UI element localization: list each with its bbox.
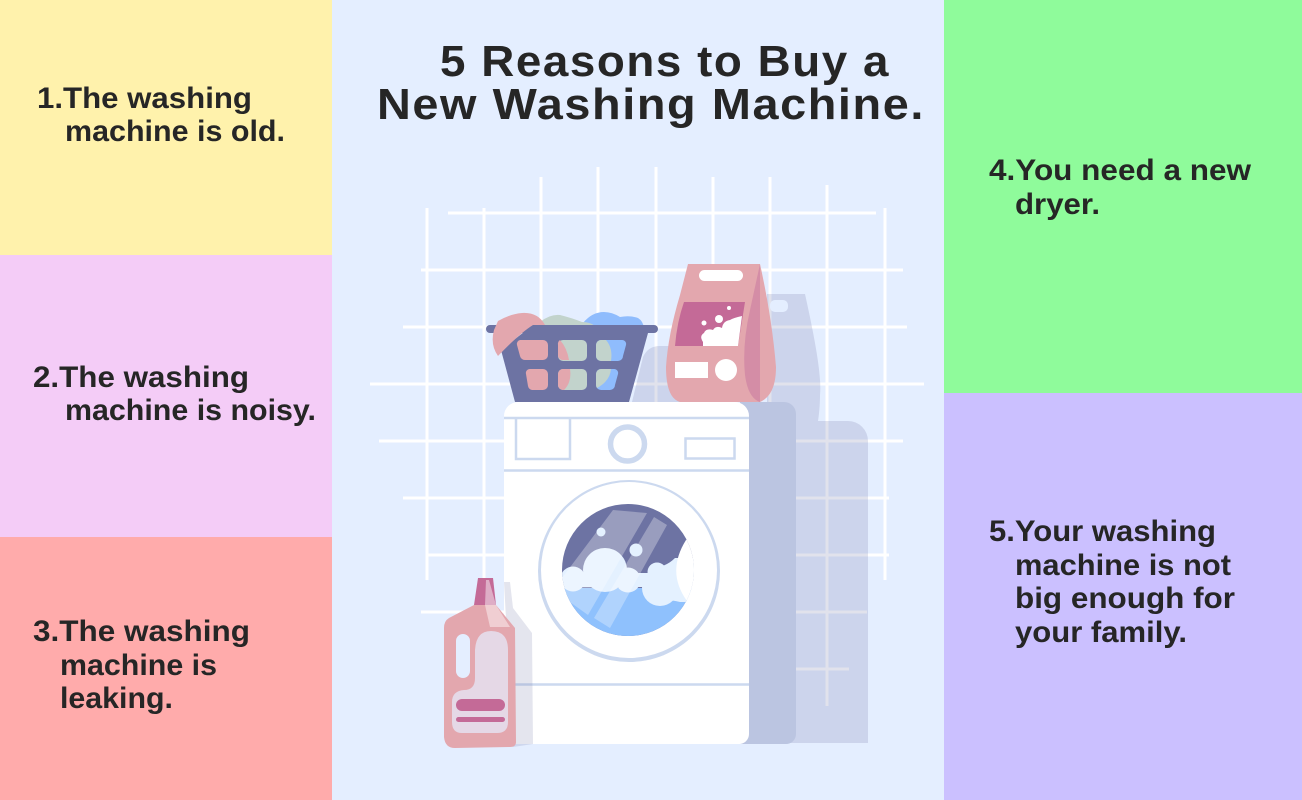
panel: reason 5: 5.Your washing — [989, 515, 1216, 548]
bag fold — [744, 264, 760, 402]
icon: detergent bottle — [444, 578, 516, 748]
bottle label — [452, 631, 508, 733]
panel: reason 1: machine is old. — [65, 115, 285, 148]
basket holes — [517, 340, 626, 390]
machine panel lines — [504, 418, 749, 684]
title: New Washing Machine. — [377, 80, 925, 129]
bag white dot — [715, 359, 737, 381]
icon: shadow handle — [770, 300, 788, 312]
blue cloth — [580, 312, 644, 328]
panel: reason 4: dryer. — [1015, 188, 1100, 221]
bubbles — [596, 528, 642, 556]
panel: reason 2: 2.The washing — [33, 361, 249, 394]
panel: reason 4: 4.You need a new — [989, 154, 1252, 187]
bottle stripes — [456, 699, 505, 711]
glass reflections — [562, 510, 647, 615]
green cloth — [540, 315, 597, 328]
bottle handle hole — [456, 634, 470, 678]
panel: reason 5: machine is not — [1015, 549, 1231, 582]
basket rim — [486, 325, 658, 333]
panel: reason 5: your family. — [1015, 616, 1187, 649]
panel: centre background — [332, 0, 944, 800]
panel: reason 3 — [0, 537, 332, 800]
panel: reason 4 — [944, 0, 1302, 393]
right bite — [676, 540, 694, 600]
machine door ring — [538, 480, 720, 662]
icon: detergent bag — [666, 264, 776, 402]
pink cloth — [493, 313, 545, 356]
panel: reason 3: leaking. — [60, 682, 173, 715]
bottle shadow — [504, 582, 533, 747]
panel: reason 2: machine is noisy. — [65, 394, 316, 427]
bag handle — [699, 270, 743, 281]
bottle highlight — [485, 580, 510, 627]
foam — [560, 548, 696, 606]
shadows behind the machine — [632, 294, 868, 743]
panel: reason 5 — [944, 393, 1302, 800]
bottle body — [444, 605, 516, 748]
machine door glass — [562, 504, 694, 636]
panel: reason 5: big enough for — [1015, 582, 1235, 615]
machine side — [740, 402, 796, 744]
title: 5 Reasons to Buy a — [440, 37, 890, 86]
title — [377, 37, 925, 129]
bag label — [675, 302, 745, 346]
basket body — [501, 325, 648, 402]
bag front — [666, 264, 776, 402]
bag foam — [701, 316, 742, 346]
bottle cap — [474, 578, 496, 605]
machine body — [504, 402, 749, 744]
icon: laundry basket — [486, 312, 658, 402]
panel: reason 1: 1.The washing — [37, 82, 252, 115]
washing machine — [504, 402, 796, 744]
panel: reason 2 — [0, 255, 332, 537]
panel: reason 1 — [0, 0, 332, 255]
panel: reason 3: 3.The washing — [33, 615, 250, 648]
bag white tag — [675, 362, 708, 378]
panel: reason 3: machine is — [60, 649, 217, 682]
